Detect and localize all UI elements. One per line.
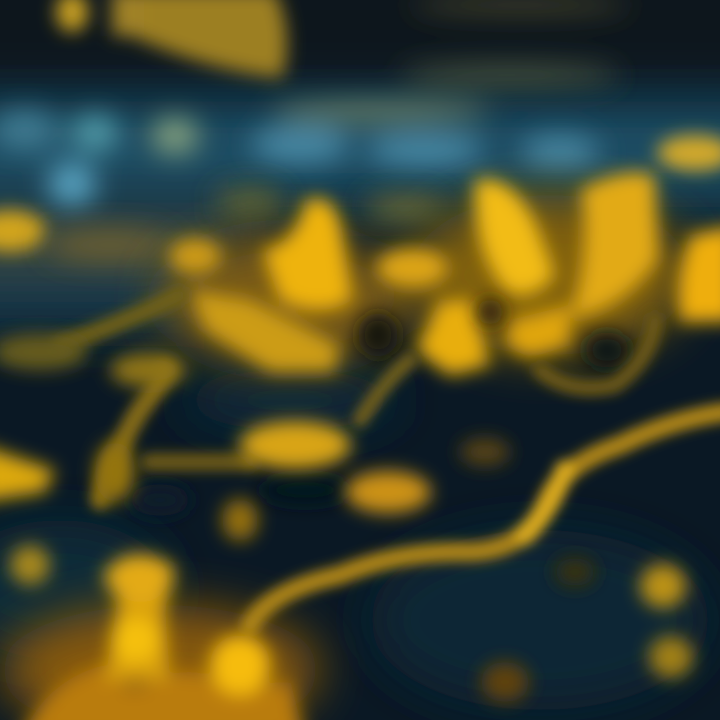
left edge bar <box>0 210 46 252</box>
golden central cluster glow <box>0 195 690 720</box>
mid faint marks <box>45 187 445 261</box>
dark gaps between the cluster <box>130 299 629 516</box>
light blue highlights <box>0 0 630 206</box>
bright bottom glow <box>20 554 305 720</box>
golden network lines <box>60 295 720 625</box>
top golden building <box>56 0 287 78</box>
golden peaks <box>169 172 720 376</box>
right edge bar <box>657 135 720 171</box>
golden lower blobs <box>0 334 693 702</box>
